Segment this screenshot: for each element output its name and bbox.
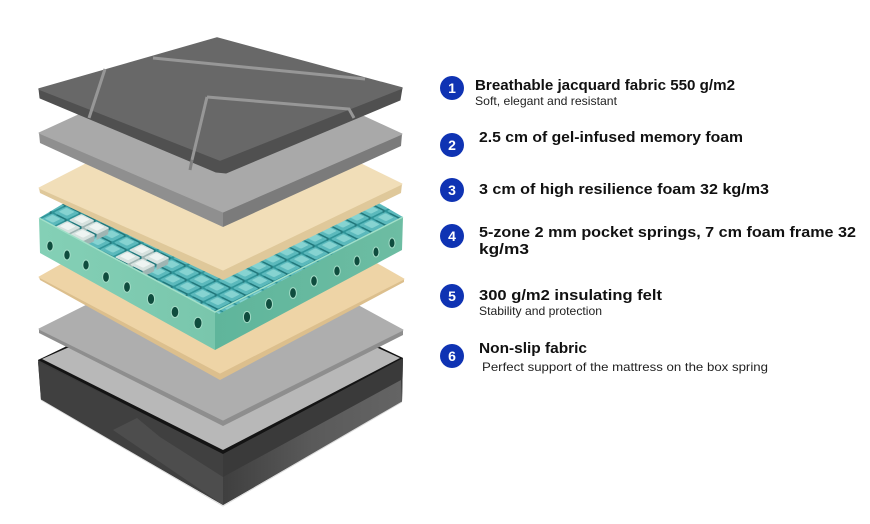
badge 6: 6 [448,348,456,364]
layer 3: high resilience foam [39,95,402,280]
heading 2: 2.5 cm of gel-infused memory foam [479,129,743,146]
layer 6: base with non-slip fabric [38,346,403,506]
badge 3: 3 [448,182,456,198]
heading 6: Non-slip fabric [479,340,587,357]
frame holes [47,238,395,329]
badge 1: 1 [448,80,456,96]
description 6: Perfect support of the mattress on the box spring [482,360,768,374]
badge 6 [440,344,464,368]
layer 5: insulating felt [39,175,404,380]
badge 1 [440,76,464,100]
badge 2 [440,133,464,157]
item 1: jacquard fabric [440,76,735,108]
layer 1: jacquard fabric [39,38,402,173]
description 1: Soft, elegant and resistant [475,94,618,108]
fabric stripes [89,58,365,160]
pocket spring grid [40,204,402,314]
badge 3 [440,178,464,202]
heading 1: Breathable jacquard fabric 550 g/m2 [475,77,735,94]
layer 6: gray non-slip sheet [39,305,403,426]
heading 5: 300 g/m2 insulating felt [479,287,662,304]
heading 4 second line: kg/m3 [479,241,529,258]
foam frame right face [215,217,403,350]
heading 3: 3 cm of high resilience foam 32 kg/m3 [479,181,769,198]
item 6: non-slip fabric [440,340,768,374]
badge 5: 5 [448,288,456,304]
badge 2: 2 [448,137,456,153]
item 3: high resilience foam [440,178,769,202]
item 2: memory foam [440,129,743,157]
badge 4 [440,224,464,248]
layer 4: pocket springs in foam frame [38,204,404,350]
heading 4: 5-zone 2 mm pocket springs, 7 cm foam frame 32 [479,224,856,241]
badge 4: 4 [448,228,456,244]
badge 5 [440,284,464,308]
foam frame left face [39,218,215,350]
item 5: insulating felt [440,284,662,318]
description 5: Stability and protection [479,304,602,318]
item 4: pocket springs [440,224,856,258]
layer 2: gel-infused memory foam [39,50,402,227]
frame highlight [39,217,403,312]
